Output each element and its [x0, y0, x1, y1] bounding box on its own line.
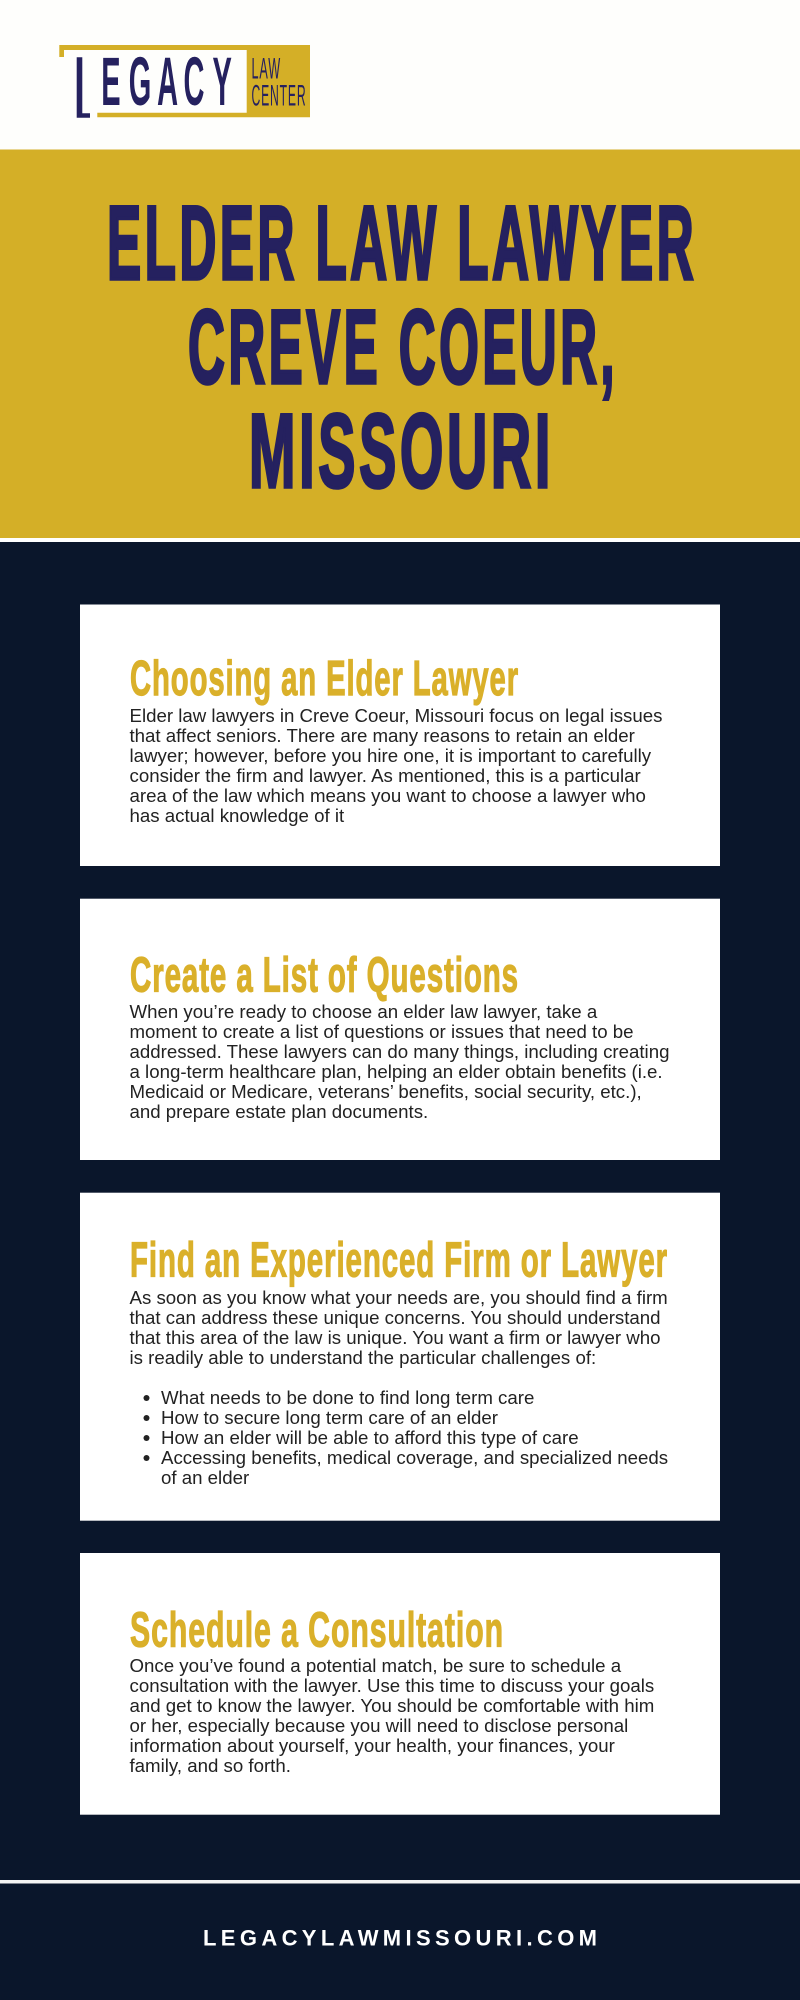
panel: Schedule a Consultation [80, 1553, 720, 1815]
header band [0, 0, 800, 150]
panel: Choosing an Elder Lawyer [80, 604, 720, 866]
bullet list [144, 1387, 668, 1488]
title band [0, 150, 800, 538]
panel: Create a List of Questions [80, 899, 720, 1160]
body text: Find an Experienced Firm or Lawyer: is readily able to understand the particular challenges of: [130, 1347, 596, 1368]
heading: Schedule a Consultation: Schedule a Consultation [130, 1604, 504, 1658]
body text: Create a List of Questions: Medicaid or Medicare, veterans’ benefits, social security, etc.), [130, 1081, 642, 1102]
body text: Schedule a Consultation [130, 1655, 654, 1776]
body text: Find an Experienced Firm or Lawyer: that can address these unique concerns. You should understand [130, 1307, 661, 1328]
logo: Legacy Law Center: C [184, 44, 204, 121]
body text: Create a List of Questions [130, 1001, 669, 1122]
body text: Schedule a Consultation: and get to know the lawyer. You should be comfortable with him [130, 1695, 654, 1716]
logo: Legacy Law Center: A [157, 44, 178, 121]
bullet list: of an elder [161, 1467, 249, 1488]
body text: Choosing an Elder Lawyer [130, 705, 662, 826]
body text: Choosing an Elder Lawyer: consider the firm and lawyer. As mentioned, this is a particular [130, 765, 641, 786]
body text: Choosing an Elder Lawyer: has actual knowledge of it [130, 805, 345, 826]
title band white rule [0, 538, 800, 542]
logo: Legacy Law Center: E [101, 44, 121, 121]
body text: Choosing an Elder Lawyer: Elder law lawyers in Creve Coeur, Missouri focus on legal issues [130, 705, 662, 726]
body text: Choosing an Elder Lawyer: lawyer; however, before you hire one, it is important to carefully [130, 745, 652, 766]
body text: Find an Experienced Firm or Lawyer: As soon as you know what your needs are, you should find a firm [130, 1287, 668, 1308]
body text: Create a List of Questions: and prepare estate plan documents. [130, 1101, 428, 1122]
body text: Create a List of Questions: When you’re ready to choose an elder law lawyer, take a [130, 1001, 598, 1022]
heading: Create a List of Questions: Create a List of Questions [130, 949, 519, 1003]
logo: Legacy Law Center: LAW [252, 52, 281, 85]
bullet list: How an elder will be able to afford this type of care [161, 1427, 579, 1448]
body text: Choosing an Elder Lawyer: that affect seniors. There are many reasons to retain an elder [130, 725, 635, 746]
body text: Create a List of Questions: a long-term healthcare plan, helping an elder obtain benefits (i.e. [130, 1061, 663, 1082]
footer website: LEGACYLAWMISSOURI.COM [203, 1926, 597, 1951]
body text: Schedule a Consultation: or her, especially because you will need to disclose personal [130, 1715, 628, 1736]
bullet list: Accessing benefits, medical coverage, and specialized needs [161, 1447, 668, 1468]
panel: Find an Experienced Firm or Lawyer [80, 1193, 720, 1521]
footer white rule [0, 1880, 800, 1884]
main title [107, 185, 697, 510]
logo: Legacy Law Center [59, 44, 310, 121]
text: CENTER [252, 79, 306, 112]
logo: Legacy Law Center: G [129, 44, 151, 121]
body text: Choosing an Elder Lawyer: area of the law which means you want to choose a lawyer who [130, 785, 646, 806]
bullet list: What needs to be done to find long term care [161, 1387, 534, 1408]
body text: Create a List of Questions: moment to create a list of questions or issues that need to be [130, 1021, 634, 1042]
bullet list: How to secure long term care of an elder [161, 1407, 498, 1428]
body text: Schedule a Consultation: family, and so forth. [130, 1755, 291, 1776]
body text: Find an Experienced Firm or Lawyer: that this area of the law is unique. You want a firm or lawyer who [130, 1327, 660, 1348]
body text: Create a List of Questions: addressed. These lawyers can do many things, including creating [130, 1041, 669, 1062]
heading: Choosing an Elder Lawyer: Choosing an Elder Lawyer [130, 652, 519, 706]
body text: Schedule a Consultation: information about yourself, your health, your finances, your [130, 1735, 615, 1756]
body text: Find an Experienced Firm or Lawyer [130, 1287, 668, 1368]
body text: Schedule a Consultation: consultation with the lawyer. Use this time to discuss your goals [130, 1675, 654, 1696]
body text: Schedule a Consultation: Once you’ve found a potential match, be sure to schedule a [130, 1655, 622, 1676]
logo: Legacy Law Center: Y [213, 44, 232, 121]
